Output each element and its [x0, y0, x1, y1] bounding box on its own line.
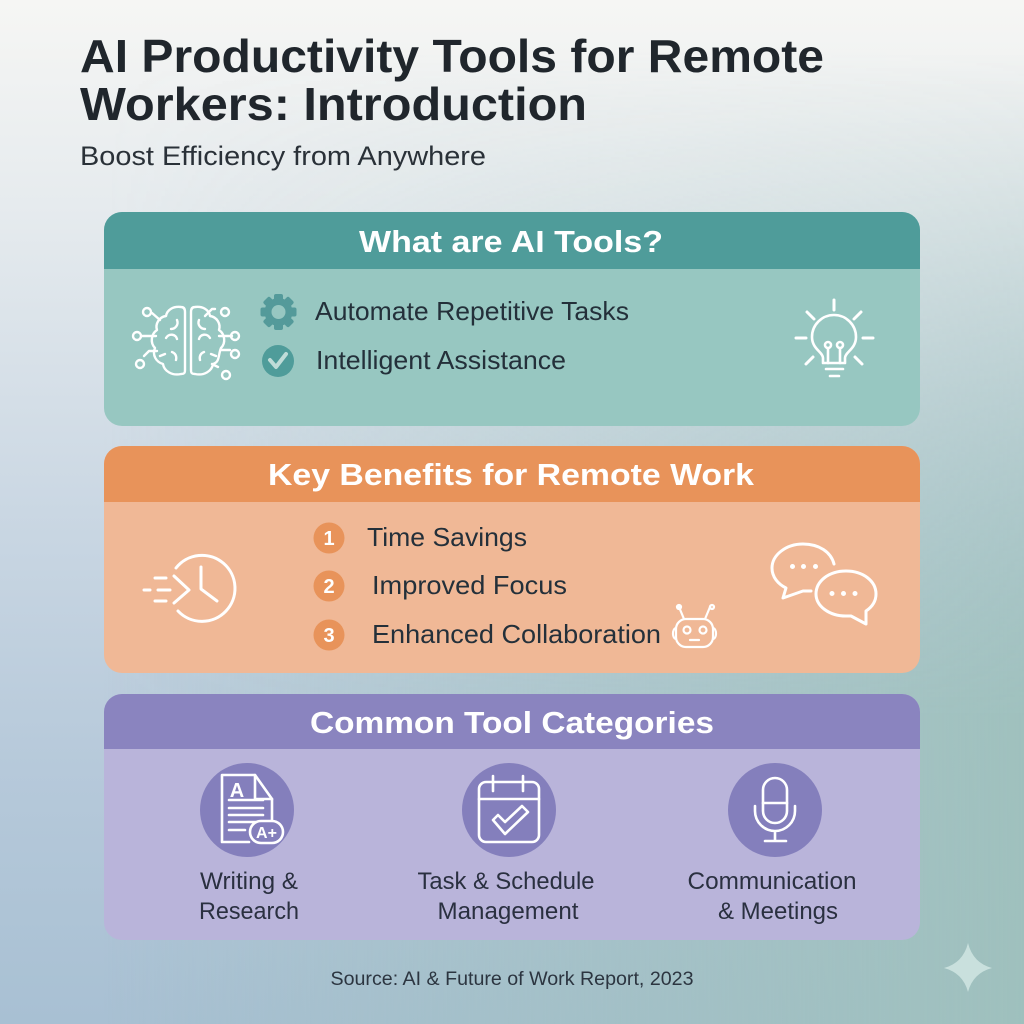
label: communication and meetings — [688, 868, 856, 925]
label: writing and research: Research — [199, 898, 299, 925]
benefit: improved focus: Improved Focus — [372, 570, 567, 600]
icon: graded document: A+ — [256, 825, 277, 842]
title: AI Productivity Tools for Remote — [80, 30, 824, 82]
icon: fast clock — [144, 555, 235, 621]
label: task and schedule: Task & Schedule — [418, 868, 594, 895]
title — [80, 30, 824, 130]
panel header: common tool categories: Common Tool Categories — [310, 705, 714, 740]
icon: sparkle — [944, 943, 992, 992]
panel: common tool categories — [104, 694, 920, 940]
panel header: what are AI tools: What are AI Tools? — [359, 224, 663, 259]
number badge 3: 3 — [323, 625, 335, 647]
icon: robot — [673, 605, 716, 647]
icon: circuit brain — [133, 307, 239, 379]
icon: gear — [260, 294, 296, 330]
panel header: what are AI tools — [104, 212, 920, 269]
label: communication and meetings: & Meetings — [718, 898, 838, 925]
panel: key benefits — [104, 446, 920, 673]
number badge 1: 1 — [323, 528, 335, 550]
label: writing and research: Writing & — [200, 868, 298, 895]
benefit: time savings: Time Savings — [367, 522, 527, 552]
panel header: key benefits: Key Benefits for Remote Work — [268, 457, 755, 492]
panel: what are AI tools — [104, 212, 920, 426]
icon: light bulb — [796, 300, 873, 376]
number badge 2 — [314, 570, 344, 602]
label: writing and research — [199, 868, 299, 925]
panel header: common tool categories — [104, 694, 920, 749]
source note: Source: AI & Future of Work Report, 2023 — [330, 969, 694, 990]
icon: microphone — [728, 763, 822, 857]
bullet text: intelligent: Intelligent Assistance — [316, 345, 566, 375]
bullet text: automate: Automate Repetitive Tasks — [315, 296, 629, 326]
category: writing and research — [199, 763, 299, 925]
panel header: key benefits — [104, 446, 920, 502]
icon: check badge — [262, 345, 294, 377]
subtitle: Boost Efficiency from Anywhere — [80, 141, 486, 171]
benefit: enhanced collaboration: Enhanced Collaboration — [372, 619, 661, 649]
label: task and schedule: Management — [438, 898, 579, 925]
icon: chat bubbles — [772, 544, 876, 624]
label: task and schedule — [418, 868, 594, 925]
number badge 3 — [314, 620, 344, 650]
icon: graded document — [200, 763, 294, 857]
icon: graded document: A — [230, 780, 244, 802]
category: task and schedule — [418, 763, 594, 925]
category: communication and meetings — [688, 763, 856, 925]
icon: calendar check — [462, 763, 556, 857]
title: Workers: Introduction — [80, 78, 587, 130]
number badge 2: 2 — [323, 576, 335, 598]
number badge 1 — [314, 522, 344, 554]
label: communication and meetings: Communication — [688, 868, 856, 895]
